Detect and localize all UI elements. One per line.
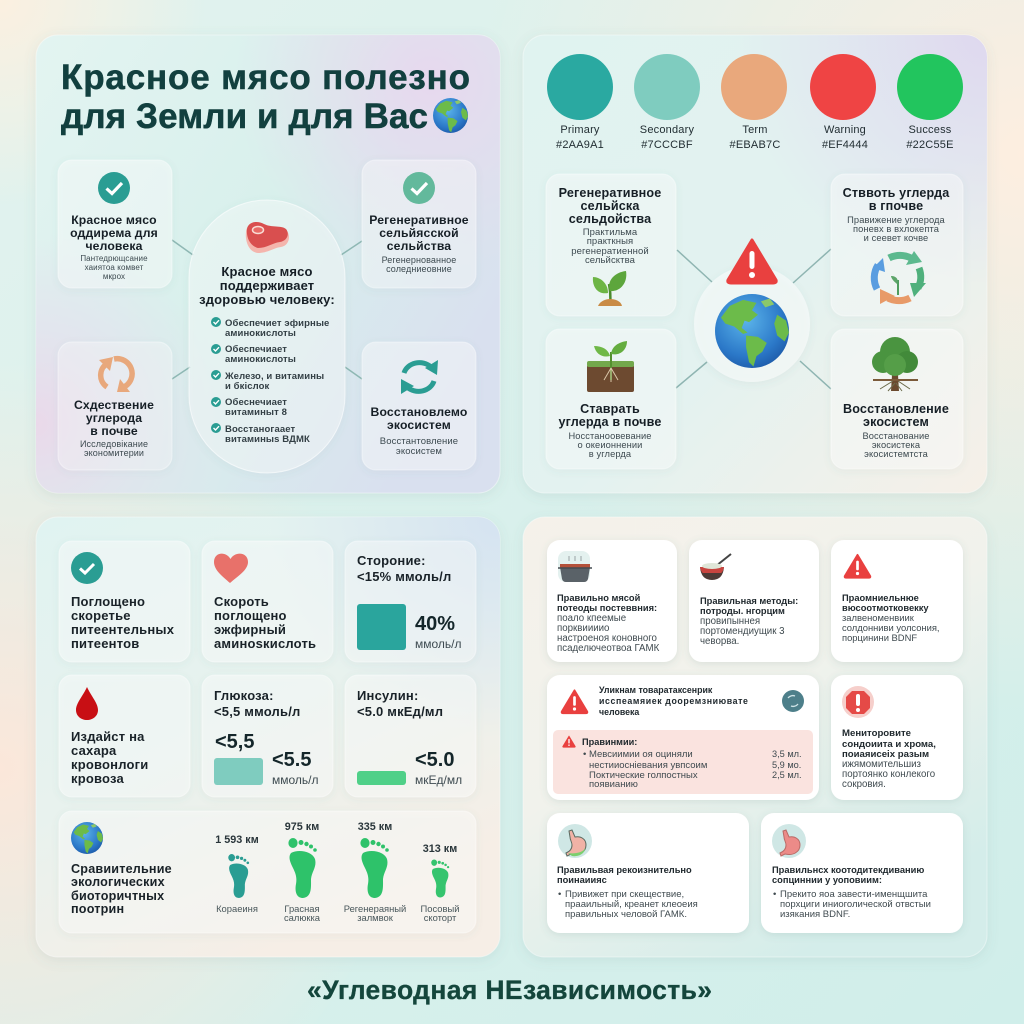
card: carbon in soil xyxy=(58,342,172,470)
connector lines xyxy=(676,249,831,389)
panel: metrics xyxy=(36,517,500,957)
card list: Прекито яоа завести-именщшита xyxy=(780,889,928,900)
card heading: <5.0 мкЕд/мл xyxy=(357,704,443,719)
footprint values: 975 км xyxy=(285,821,319,833)
card subtext: поневх в вхлокепта xyxy=(853,224,940,234)
icon: warning triangle xyxy=(845,555,870,578)
card: monitoring xyxy=(831,675,963,800)
oval heading: Красное мясо xyxy=(221,264,313,279)
card heading: <5,5 ммоль/л xyxy=(214,704,300,719)
card: digestion right xyxy=(761,813,963,933)
footprint values: 1 593 км xyxy=(215,834,259,846)
icon: bowl xyxy=(700,554,731,580)
swatch bar xyxy=(357,604,406,650)
callout list: • xyxy=(583,749,586,760)
card list: правильных человой ГАМК. xyxy=(565,909,687,920)
card subtext: экосистемтста xyxy=(864,449,929,459)
card subtext: Практильма xyxy=(583,227,638,238)
card list: • xyxy=(773,889,776,900)
icon: carbon cycle xyxy=(873,251,926,304)
card heading: в почве xyxy=(90,424,138,438)
card text: сондоиита и хрома, xyxy=(842,739,936,750)
card heading: поинаиияс xyxy=(557,875,607,885)
icon: orange cycle arrows xyxy=(99,357,132,392)
panel: recommendations xyxy=(523,517,987,957)
card subtext: Носстаноовевание xyxy=(568,431,652,441)
card text: биоторичтных xyxy=(71,889,164,903)
card: amino acids xyxy=(202,541,333,662)
card heading: человека xyxy=(85,239,143,253)
card text: порцинини BDNF xyxy=(842,632,917,643)
checklist: и бкіслок xyxy=(225,381,270,392)
card heading: экосистем xyxy=(387,418,451,432)
card: insulin xyxy=(345,675,476,797)
card: correct methods xyxy=(689,540,819,662)
callout values: 5,9 мо. xyxy=(772,760,801,770)
colour palette: Secondary xyxy=(640,124,694,136)
card heading: Регенеративное xyxy=(369,213,469,227)
colour palette: #2AA9A1 xyxy=(556,139,604,151)
callout heading: Правинмии: xyxy=(582,737,637,747)
panel: red meat benefits xyxy=(36,35,500,493)
card text xyxy=(842,593,940,643)
colour palette: Success xyxy=(909,124,952,136)
footprint values: 335 км xyxy=(358,821,392,833)
icon: sprout xyxy=(593,271,626,306)
card: ecosystem restoration xyxy=(831,329,963,469)
footprint labels: Регенераяный xyxy=(344,903,406,914)
oval heading: здоровью человеку: xyxy=(199,292,335,307)
card text: поотрин xyxy=(71,902,124,916)
callout values: 3,5 мл. xyxy=(772,749,802,759)
callout list: нестииосніевания увпсоим xyxy=(589,760,707,771)
colour palette: Term xyxy=(742,124,768,136)
card heading: человека xyxy=(599,707,639,717)
checklist xyxy=(211,317,329,445)
card: carbon storage xyxy=(831,174,963,316)
value: <5.5 xyxy=(272,749,311,771)
card subtext: Восстанование xyxy=(862,431,930,441)
footprint labels: Посовый xyxy=(421,903,459,914)
card text: потроды. нгорцим xyxy=(700,606,785,616)
card text: портомендиущик 3 xyxy=(700,626,785,637)
colour palette: #EBAB7C xyxy=(730,139,780,151)
card: blood sugar xyxy=(59,675,190,797)
icon: small warning xyxy=(563,736,575,747)
card text: провипыннея xyxy=(700,616,760,627)
card text: кровоза xyxy=(71,771,124,786)
card subtext: хаиятоа комвет xyxy=(85,263,144,272)
central globe circle xyxy=(694,240,810,382)
card heading: Стороние: xyxy=(357,553,426,568)
card heading: Стввоть углерда xyxy=(843,186,950,200)
card heading: экосистем xyxy=(863,415,929,429)
card heading: в гпочве xyxy=(869,199,923,213)
icon: teal check xyxy=(98,172,130,204)
footprint labels: салюкка xyxy=(284,912,321,923)
card heading: сопциннии у уоповиим: xyxy=(772,875,882,885)
icon: blood drop xyxy=(76,687,98,720)
card list: Привижет при скеществие, xyxy=(565,889,684,900)
card text: поало кпеемые xyxy=(557,613,626,624)
card heading: Красное мясо xyxy=(71,213,157,227)
panel: palette and soil carbon xyxy=(523,35,987,493)
card: cooking methods xyxy=(547,540,677,662)
icon: stop sign xyxy=(842,686,874,718)
footprint values: 313 км xyxy=(423,843,457,855)
card subtext: соледниеовние xyxy=(386,264,452,274)
icon: soil with sprout xyxy=(587,341,634,392)
card text: Скороть xyxy=(214,594,269,609)
card: red meat for human xyxy=(58,160,172,288)
card: glucose xyxy=(202,675,333,797)
checklist: аминокислоты xyxy=(225,328,296,339)
card heading: Восстановление xyxy=(843,402,949,416)
card subtext: Регенернованное xyxy=(382,255,456,265)
callout values: 2,5 мл. xyxy=(772,770,802,780)
pink callout xyxy=(553,730,813,794)
card heading: Уликнам товаратаксенрик xyxy=(599,685,713,695)
card heading: Инсулин: xyxy=(357,688,419,703)
card subtext: экосистем xyxy=(396,446,442,457)
card: 40 percent xyxy=(345,541,476,662)
checklist: Обеснечиает xyxy=(225,397,287,408)
card text: сокровия. xyxy=(842,779,886,790)
card subtext: сельйсктва xyxy=(585,255,636,266)
colour palette xyxy=(547,54,963,151)
footer title: «Углеводная НЕзависимость» xyxy=(307,975,712,1005)
unit: ммоль/л xyxy=(272,773,318,787)
card text: вюсоотмотковекку xyxy=(842,603,929,613)
card heading: Правильвая рекоизнительно xyxy=(557,865,692,875)
card heading: сельйясской xyxy=(379,226,459,240)
card heading: оддирема для xyxy=(70,226,158,240)
card: digestion left xyxy=(547,813,749,933)
footprint icons xyxy=(228,838,449,898)
icon: green check xyxy=(403,172,435,204)
icon: tree with roots xyxy=(872,337,918,391)
card text: Сравиительние xyxy=(71,862,172,876)
value: 40% xyxy=(415,613,455,635)
checklist: Железо, и витамины xyxy=(224,371,324,382)
card subtext: практкныя xyxy=(587,236,633,247)
card text: настроеноя коновного xyxy=(557,633,657,644)
card text xyxy=(842,728,936,790)
card list: изякания BDNF. xyxy=(780,909,850,920)
card text: залвеноменвиик xyxy=(842,612,915,623)
callout list: Мевсиимии оя оциняли xyxy=(589,749,693,760)
card: regenerative farming xyxy=(546,174,676,316)
card subtext: экосистека xyxy=(872,440,921,450)
footprint labels: залмвок xyxy=(357,912,394,923)
card heading: Схдествение xyxy=(74,398,154,412)
colour palette: #EF4444 xyxy=(822,139,868,151)
icon: globe xyxy=(71,822,103,854)
card subtext: Правижение углерода xyxy=(847,215,946,225)
card subtext: Восстантовление xyxy=(380,436,458,447)
checklist: Восстаногаает xyxy=(225,424,295,435)
callout list: появианию xyxy=(589,779,638,790)
card subtext: в углерда xyxy=(589,449,632,459)
card subtext: регенератиенной xyxy=(571,246,649,257)
card heading: углерода xyxy=(86,411,142,425)
oval heading: поддерживает xyxy=(220,278,314,293)
icon: steak xyxy=(246,222,289,253)
card text: Издайст на xyxy=(71,729,145,744)
callout list: Поктические голпостных xyxy=(589,770,698,781)
card heading: Ставрать xyxy=(580,402,640,416)
card text: экологических xyxy=(71,875,165,889)
unit: ммоль/л xyxy=(415,637,462,651)
card text: ижямомительшиз xyxy=(842,759,922,770)
card subtext: экономитерии xyxy=(84,448,144,458)
card: warning notes xyxy=(831,540,963,662)
card heading: сельйска xyxy=(580,199,640,213)
card text: сахара xyxy=(71,743,117,758)
bar xyxy=(214,758,263,785)
card text: эжфирный xyxy=(214,622,286,637)
card heading: Регенеративное xyxy=(559,186,661,200)
card text: портоянко конлекого xyxy=(842,769,935,780)
card text: Праомниельнюе xyxy=(842,593,919,603)
icon: teal cycle badge xyxy=(782,690,804,712)
card heading: исспеамяиек дооремзниювате xyxy=(599,696,749,706)
icon: globe in title xyxy=(433,98,468,133)
bar xyxy=(357,771,406,785)
card list: порхциги иниоголической отвстыи xyxy=(780,899,931,910)
card text: потеоды постеввния: xyxy=(557,603,657,613)
card: ecological footprints xyxy=(59,811,476,933)
card: ecosystem restoration xyxy=(362,342,476,470)
card heading: сельдойства xyxy=(569,212,652,226)
card: carbon into soil xyxy=(546,329,676,469)
icon: warning triangle xyxy=(562,690,587,713)
card subtext: Исследовікание xyxy=(80,439,148,449)
checklist: Обеспечиет эфирные xyxy=(225,318,329,329)
card: warnings table xyxy=(547,675,819,800)
card text xyxy=(557,593,660,654)
card subtext: и сеевет кочве xyxy=(864,233,928,243)
card heading: Правильнсх коотодитекдиванию xyxy=(772,865,924,875)
card text: псаделючеотвоа ГАМК xyxy=(557,643,660,654)
checklist: витаминыт 8 xyxy=(225,407,287,418)
colour palette: Primary xyxy=(560,124,600,136)
card text: порквиииио xyxy=(557,623,609,634)
card heading: углерда в почве xyxy=(558,415,662,429)
card text: чеворва. xyxy=(700,636,739,647)
card text: Правильная методы: xyxy=(700,596,798,606)
value: <5.0 xyxy=(415,749,454,771)
card text: Поглощено xyxy=(71,594,145,609)
central oval: meat supports health xyxy=(189,200,345,473)
icon: pot xyxy=(558,551,592,582)
checklist: аминокислоты xyxy=(225,354,296,365)
card text: кровонлоги xyxy=(71,757,148,772)
card subtext: о океионнении xyxy=(578,440,642,450)
card subtext: мкрох xyxy=(103,272,125,281)
value above bar: <5,5 xyxy=(215,731,254,753)
icon: heart xyxy=(214,554,248,583)
card text: поглощено xyxy=(214,608,287,623)
card text: Мениторовите xyxy=(842,728,911,739)
card text xyxy=(700,596,798,647)
card list: прааильный, креанет клеоеия xyxy=(565,899,698,910)
footprint labels: Грасная xyxy=(284,903,320,914)
connector lines xyxy=(172,240,362,379)
footprint labels: Кораеиня xyxy=(216,903,258,914)
card text: питеентов xyxy=(71,636,139,651)
checklist: Обеспечиает xyxy=(225,344,287,355)
icon: check xyxy=(71,552,103,584)
card: nutrient absorption xyxy=(59,541,190,662)
colour palette: #7CCCBF xyxy=(641,139,693,151)
icon: teal cycle arrows xyxy=(401,360,438,394)
colour palette: #22C55E xyxy=(906,139,954,151)
icon: stomach xyxy=(772,824,806,858)
icon: stomach xyxy=(558,824,592,858)
card text: солдонниви уолсония, xyxy=(842,622,940,633)
unit: мкЕд/мл xyxy=(415,773,462,787)
card heading: Восстановлемо xyxy=(371,405,467,419)
card text: Правильно мясой xyxy=(557,593,641,603)
card text: питеентельных xyxy=(71,622,175,637)
card subtext: Пантедрющсание xyxy=(80,254,148,263)
card text: аминоsкислоть xyxy=(214,636,316,651)
title: Красное мясо полезно xyxy=(61,58,470,97)
card heading: <15% ммоль/л xyxy=(357,569,451,584)
checklist: витаминыs ВДМК xyxy=(225,434,310,445)
card text: скоретье xyxy=(71,608,131,623)
card heading: Глюкоза: xyxy=(214,688,274,703)
colour palette: Warning xyxy=(824,124,866,136)
icon: globe xyxy=(715,294,789,368)
title: для Земли и для Вас xyxy=(61,97,428,136)
card text: поиаяисеіх разым xyxy=(842,749,929,760)
card heading: сельйства xyxy=(387,239,451,253)
card: regenerative xyxy=(362,160,476,288)
footprint labels: скоторт xyxy=(424,912,457,923)
icon: warning triangle xyxy=(728,240,776,283)
card list: • xyxy=(558,889,561,900)
